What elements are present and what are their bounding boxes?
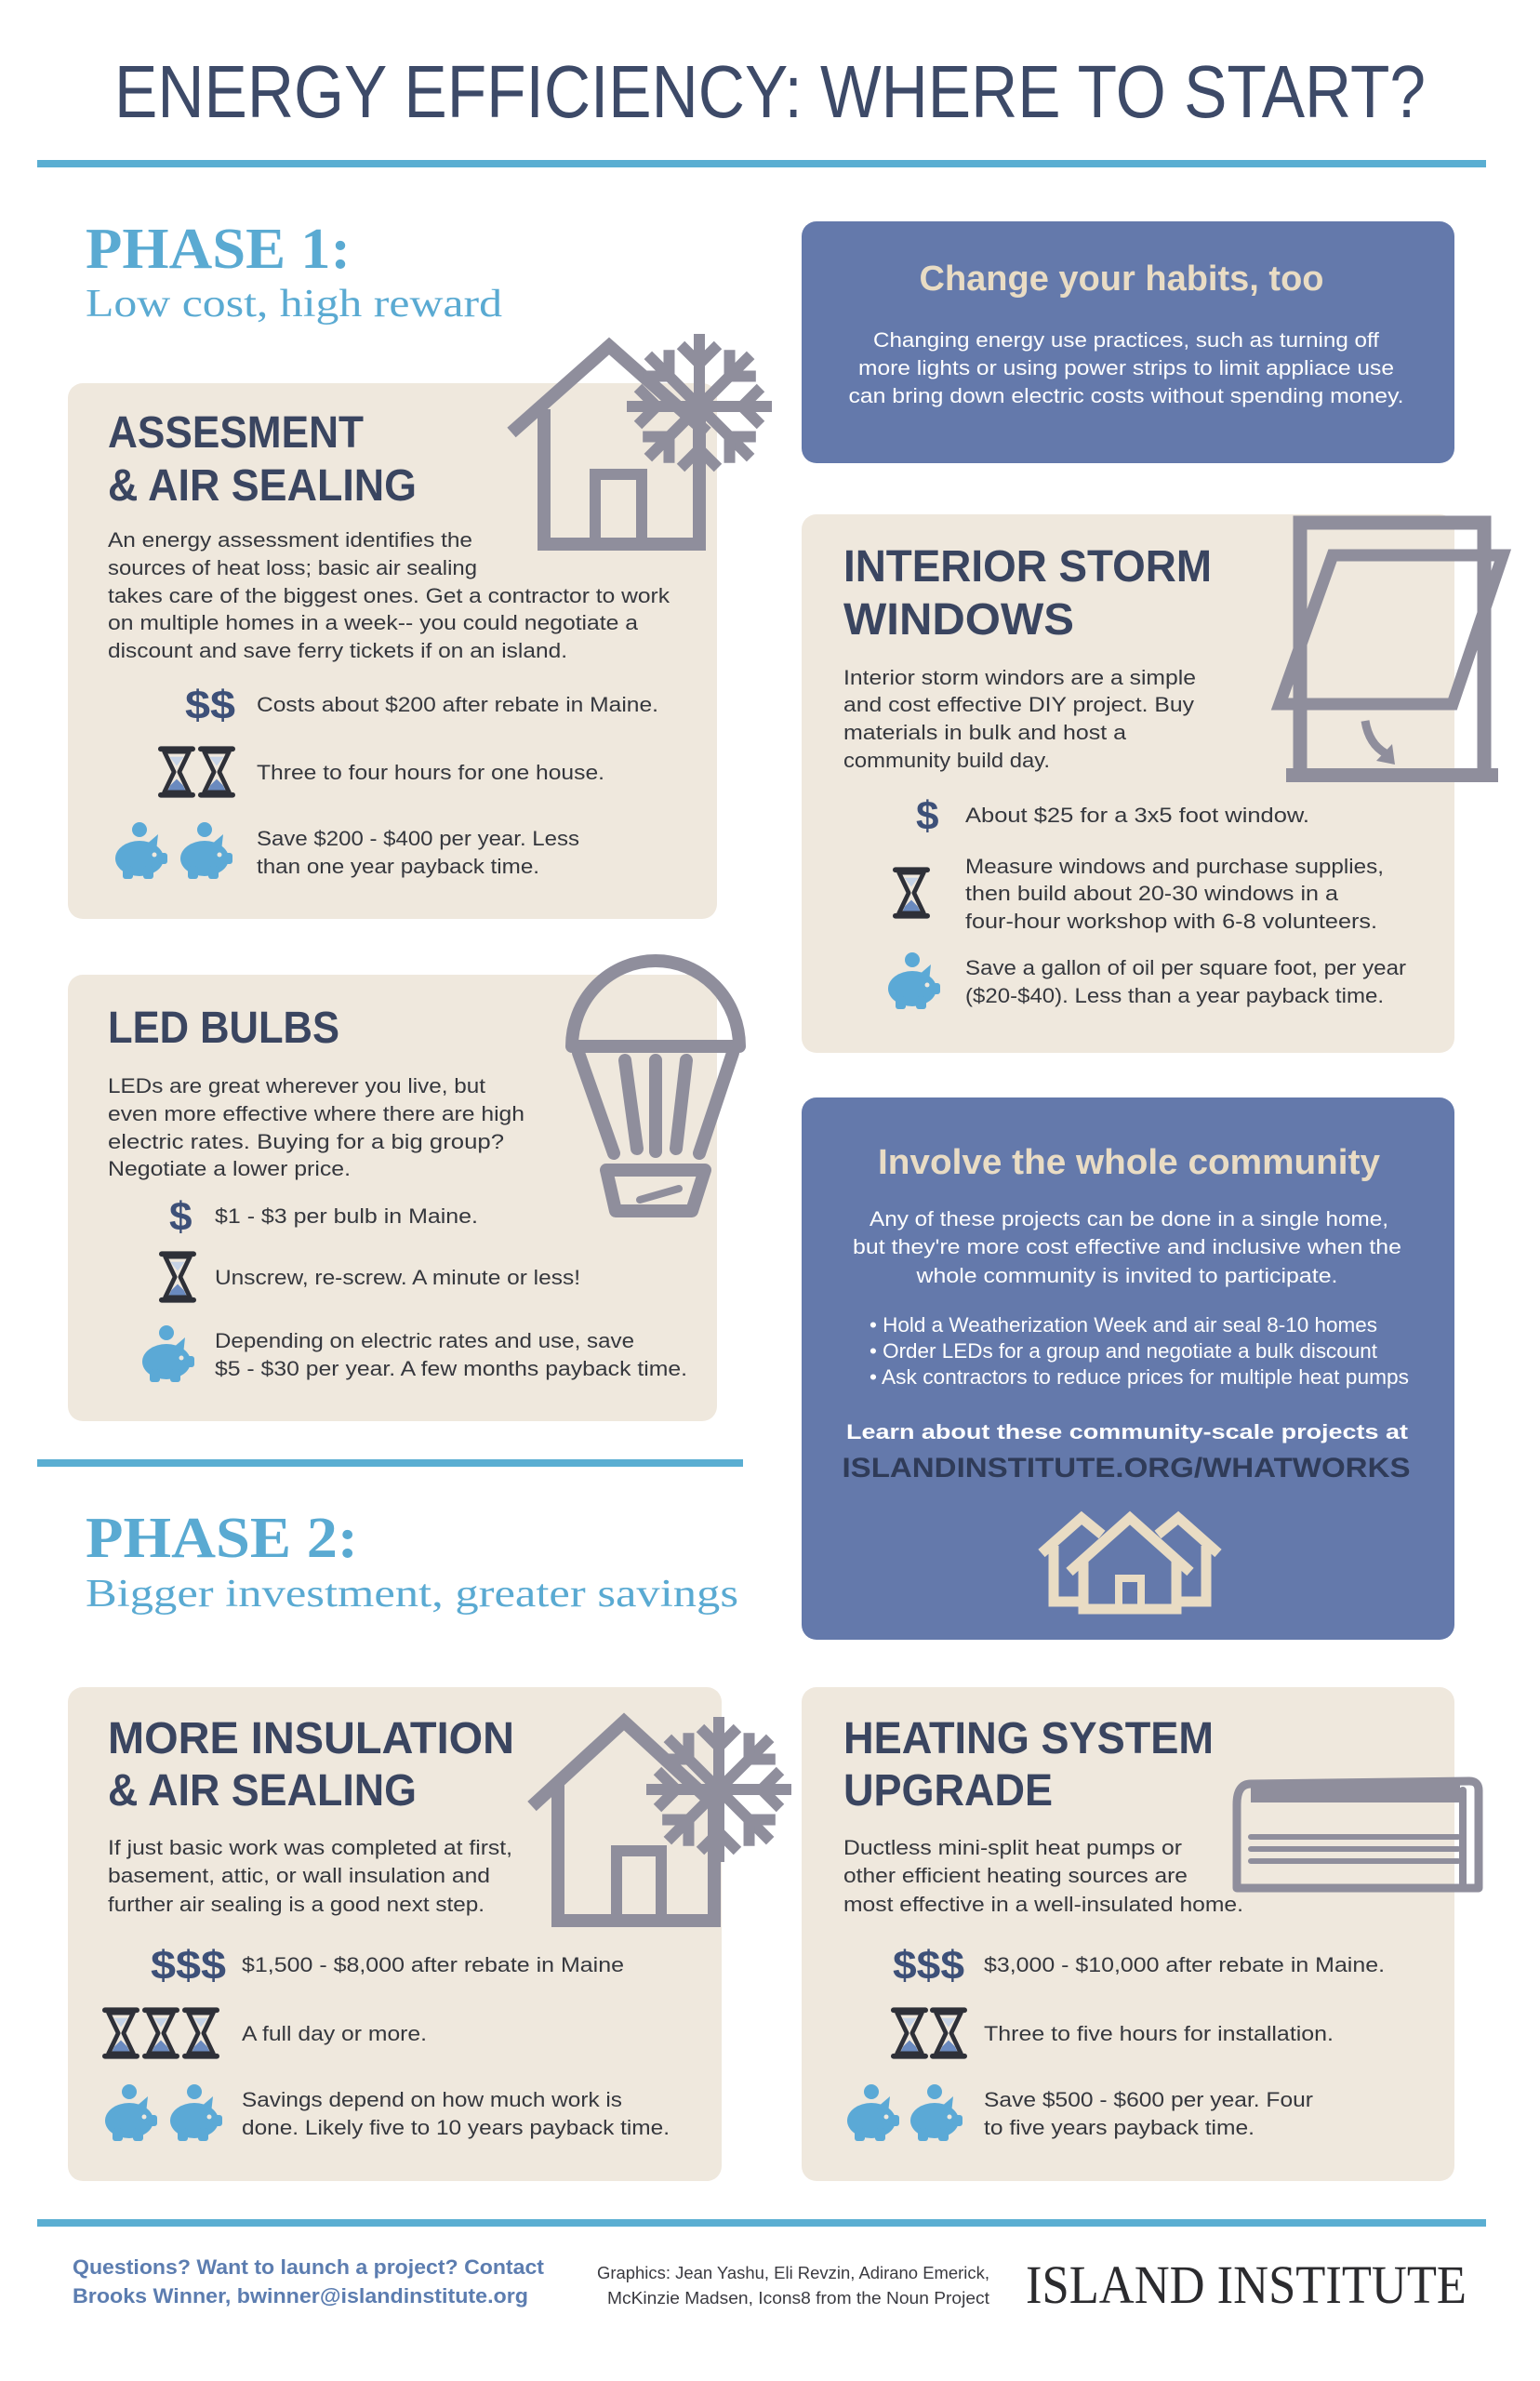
body text: community build day. [843, 749, 1050, 772]
body text [843, 666, 1196, 772]
heading: HEATING SYSTEM [843, 1714, 1214, 1763]
cost row: $3,000 - $10,000 after rebate in Maine. [984, 1953, 1385, 1976]
phase 1 heading: Low cost, high reward [86, 283, 502, 326]
body text: discount and save ferry tickets if on an island. [108, 639, 567, 662]
bullet list: • Order LEDs for a group and negotiate a bulk discount [870, 1339, 1377, 1363]
footer: credits: Graphics: Jean Yashu, Eli Revzin, Adirano Emerick, [597, 2264, 989, 2282]
callout: involve the whole community: ISLANDINSTITUTE.ORG/WHATWORKS [843, 1453, 1410, 1483]
panel: heating system upgrade [802, 1687, 1479, 2181]
callout: involve the whole community [802, 1097, 1454, 1640]
savings row [105, 2084, 670, 2141]
phase 2 heading: Bigger investment, greater savings [86, 1573, 738, 1616]
footer: credits: McKinzie Madsen, Icons8 from the Noun Project [607, 2289, 989, 2308]
phase 2 heading [86, 1507, 738, 1616]
callout: change your habits [802, 221, 1454, 463]
savings row: Savings depend on how much work is [242, 2088, 622, 2111]
bullet list: • Hold a Weatherization Week and air seal 8-10 homes [870, 1313, 1377, 1337]
cost row: $$ [185, 683, 235, 728]
body text: other efficient heating sources are [843, 1864, 1188, 1887]
body text: sources of heat loss; basic air sealing [108, 556, 477, 579]
body text: takes care of the biggest ones. Get a contractor to work [108, 584, 670, 607]
callout: involve the whole community: whole community is invited to participate. [915, 1264, 1337, 1287]
heading: MORE INSULATION [108, 1714, 514, 1763]
cost row: $ [169, 1194, 192, 1240]
body text [108, 528, 670, 662]
footer: contact: Questions? Want to launch a project? Contact [73, 2255, 545, 2279]
body text: further air sealing is a good next step. [108, 1893, 485, 1916]
callout: involve the whole community: Involve the whole community [878, 1143, 1380, 1182]
callout: change your habits: can bring down electric costs without spending money. [848, 384, 1404, 407]
icon: house with snowflake [532, 1717, 791, 1921]
time row: then build about 20-30 windows in a [965, 882, 1339, 905]
body text: Negotiate a lower price. [108, 1157, 351, 1180]
savings row: Save $500 - $600 per year. Four [984, 2088, 1313, 2111]
footer: credits [597, 2264, 989, 2308]
panel: interior storm windows [802, 514, 1503, 1053]
callout: change your habits: Changing energy use practices, such as turning off [873, 328, 1380, 352]
footer: contact: Brooks Winner, bwinner@islandinstitute.org [73, 2284, 528, 2308]
icon: light bulb [572, 961, 739, 1211]
cost row: $1 - $3 per bulb in Maine. [215, 1204, 478, 1228]
savings row: Depending on electric rates and use, save [215, 1329, 634, 1352]
heading [843, 1714, 1214, 1816]
callout: involve the whole community: Any of these projects can be done in a single home, [870, 1207, 1388, 1230]
phase 2 heading: PHASE 2: [86, 1507, 358, 1570]
callout: involve the whole community: but they're more cost effective and inclusive when the [853, 1235, 1401, 1258]
icon: house with snowflake [511, 334, 772, 544]
savings row: ($20-$40). Less than a year payback time. [965, 984, 1384, 1007]
time row [891, 2007, 1334, 2059]
panel: LED bulbs [68, 961, 739, 1421]
heading [108, 408, 417, 511]
heading [108, 1714, 514, 1816]
savings row: to five years payback time. [984, 2116, 1255, 2139]
panel: more insulation & air sealing [68, 1687, 791, 2181]
cost row: Costs about $200 after rebate in Maine. [257, 693, 658, 716]
time row [893, 855, 1384, 933]
body text: LEDs are great wherever you live, but [108, 1074, 485, 1097]
time row: Measure windows and purchase supplies, [965, 855, 1384, 878]
body text: If just basic work was completed at first, [108, 1836, 512, 1859]
savings row: done. Likely five to 10 years payback time. [242, 2116, 670, 2139]
body text: even more effective where there are high [108, 1102, 524, 1125]
savings row [888, 952, 1406, 1009]
time row: Unscrew, re-screw. A minute or less! [215, 1266, 580, 1289]
footer: contact [73, 2255, 545, 2308]
cost row [185, 683, 658, 728]
savings row: than one year payback time. [257, 855, 539, 878]
icon: mini-split unit [1237, 1781, 1479, 1888]
footer: logo: ISLAND INSTITUTE [1026, 2255, 1467, 2315]
cost row: $$$ [151, 1943, 226, 1989]
body text [843, 1836, 1243, 1916]
body text: Interior storm windors are a simple [843, 666, 1196, 689]
icon: three houses [1042, 1518, 1218, 1609]
body text: Ductless mini-split heat pumps or [843, 1836, 1182, 1859]
savings row [142, 1325, 687, 1382]
callout: change your habits: more lights or using power strips to limit appliace use [858, 356, 1394, 379]
bullet list: • Ask contractors to reduce prices for multiple heat pumps [870, 1365, 1409, 1389]
cost row [916, 793, 1309, 839]
body text [108, 1836, 512, 1916]
cost row [151, 1943, 624, 1989]
body text: electric rates. Buying for a big group? [108, 1130, 504, 1153]
panel: assessment & air sealing [68, 334, 772, 919]
cost row: $1,500 - $8,000 after rebate in Maine [242, 1953, 624, 1976]
heading [843, 542, 1212, 645]
phase 1 heading [86, 218, 502, 326]
time row: Three to four hours for one house. [257, 761, 604, 784]
savings row: Save $200 - $400 per year. Less [257, 827, 579, 850]
phase 1 heading: PHASE 1: [86, 218, 351, 281]
heading: WINDOWS [843, 595, 1074, 645]
callout: involve the whole community: Learn about these community-scale projects at [846, 1420, 1409, 1443]
body text: on multiple homes in a week-- you could negotiate a [108, 611, 639, 634]
heading: & AIR SEALING [108, 461, 417, 511]
savings row: Save a gallon of oil per square foot, per year [965, 956, 1406, 979]
body text [108, 1074, 524, 1180]
time row [159, 1251, 580, 1303]
body text: and cost effective DIY project. Buy [843, 693, 1194, 716]
body text: most effective in a well-insulated home. [843, 1893, 1243, 1916]
savings row: $5 - $30 per year. A few months payback time. [215, 1357, 687, 1380]
body text: An energy assessment identifies the [108, 528, 472, 552]
heading: UPGRADE [843, 1766, 1053, 1816]
callout: change your habits: Change your habits, too [919, 259, 1324, 299]
bullet list [870, 1313, 1409, 1389]
body text: basement, attic, or wall insulation and [108, 1864, 490, 1887]
cost row [169, 1194, 478, 1240]
cost row: $ [916, 793, 938, 839]
body text: materials in bulk and host a [843, 721, 1127, 744]
savings row [115, 822, 579, 879]
time row: Three to five hours for installation. [984, 2022, 1334, 2045]
cost row: About $25 for a 3x5 foot window. [965, 804, 1309, 827]
heading: INTERIOR STORM [843, 542, 1212, 592]
heading: ASSESMENT [108, 408, 364, 458]
cost row: $$$ [893, 1943, 964, 1989]
heading: LED BULBS [108, 1004, 339, 1053]
cost row [893, 1943, 1385, 1989]
icon: window [1280, 523, 1503, 782]
savings row [847, 2084, 1313, 2141]
time row [158, 746, 604, 798]
heading: & AIR SEALING [108, 1766, 417, 1816]
time row: A full day or more. [242, 2022, 427, 2045]
time row [102, 2007, 427, 2059]
time row: four-hour workshop with 6-8 volunteers. [965, 910, 1377, 933]
